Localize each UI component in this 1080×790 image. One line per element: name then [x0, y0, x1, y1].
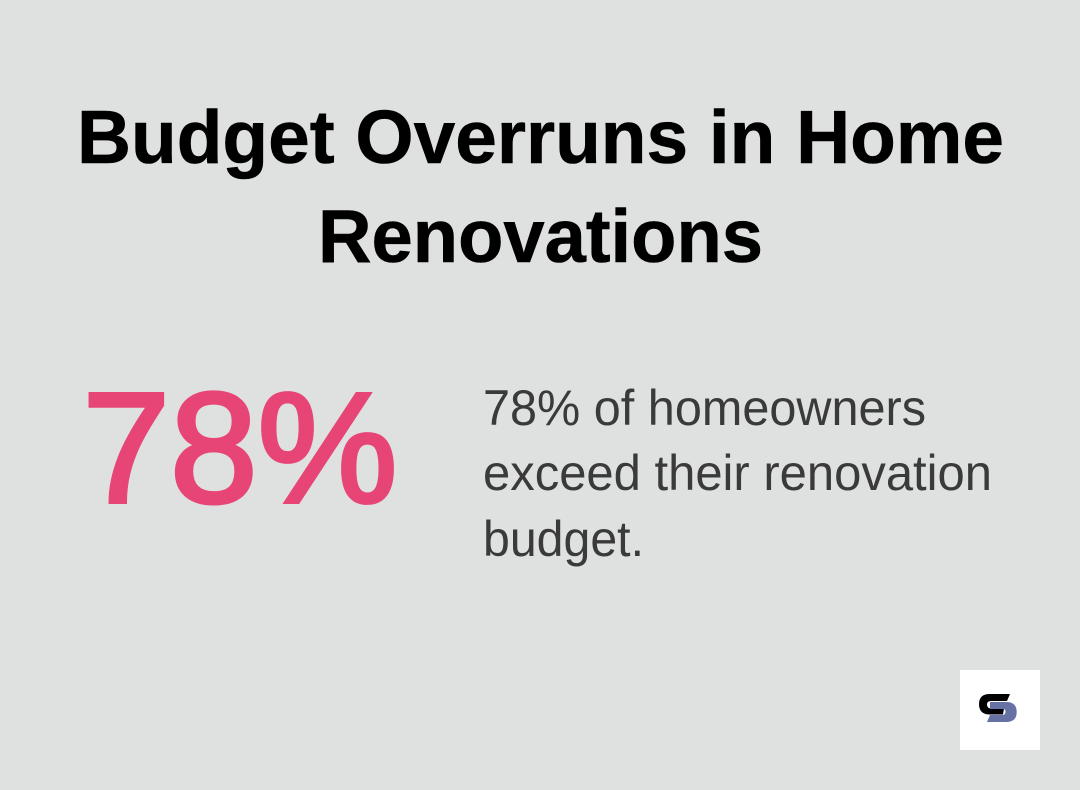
description text: exceed their renovation: [483, 445, 992, 501]
description text: budget.: [483, 511, 644, 567]
logo badge: [960, 670, 1040, 750]
description text: 78% of homeowners: [483, 380, 926, 436]
description text: [483, 380, 992, 567]
title: Renovations: [318, 194, 763, 278]
title: Budget Overruns in Home: [77, 95, 1004, 179]
title: [77, 95, 1004, 278]
icon: logo S mark: [979, 694, 1017, 722]
big statistic: 78%: 78%: [82, 361, 398, 536]
